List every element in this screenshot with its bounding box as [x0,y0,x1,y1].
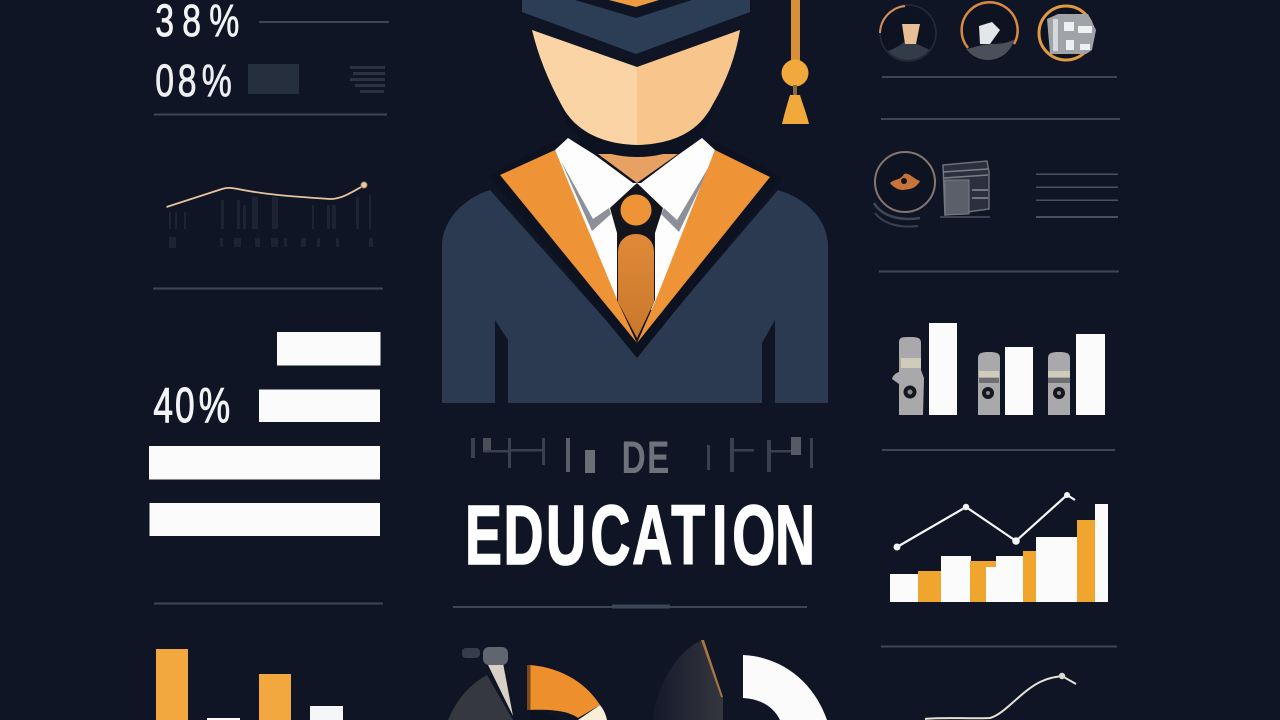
orange donut chart [527,665,607,720]
face left half [532,30,637,145]
subtitle left marks [471,438,595,473]
stat: 08 percent: 08% [155,56,232,106]
combo line and bar chart [890,492,1108,602]
faded stat note [350,66,385,93]
stepped columns [890,504,1108,602]
dark collar outline [488,141,783,358]
bottom right curve chart [925,673,1076,719]
stat: 40 percent: 40% [153,378,230,433]
device 3 [1048,352,1070,415]
donut cream segment [578,705,607,720]
trend line [897,495,1075,547]
subtitle right marks [707,437,813,472]
gauge base wedge [448,675,513,720]
emblem circle [874,152,935,227]
white shirt [555,138,715,310]
divider lines [153,21,1120,648]
face shadow ring [561,104,713,155]
face right half [637,30,740,145]
graduate figure [442,0,828,403]
avatar: book [1039,6,1096,60]
trend line [166,186,363,207]
gauge knob tab [462,648,480,658]
gauge needle [488,663,513,716]
small line chart [166,182,373,248]
suit jacket [442,190,828,403]
title: EDUCATION [465,490,815,583]
bottom centre gauge [448,647,513,720]
tassel ball [782,60,808,86]
horizontal bar chart [149,332,380,536]
tassel fringe [782,95,809,124]
device 2 [978,352,1000,415]
avatar: person [880,5,940,66]
wedge highlight edge [701,640,723,697]
avatar icons row [880,2,1096,66]
emblem and document icons [874,152,1118,227]
wedge body [653,640,723,720]
right lapel [637,150,770,343]
mortarboard cap [522,0,750,54]
tassel connector [793,85,797,95]
donut inner edge [527,665,530,710]
donut orange segment [530,665,600,718]
cap top button [609,0,659,7]
text placeholder lines [1036,174,1118,218]
white donut chart [743,655,827,720]
subtitle word: DE [622,433,671,483]
neck [598,154,678,183]
tie knot [620,194,652,226]
faded stat bar [248,64,299,94]
device and bar chart [892,323,1105,415]
document icon [940,161,990,218]
device 1 [892,337,924,415]
end point [361,182,367,188]
data points [894,492,1070,550]
bottom left bar chart [156,649,343,720]
avatar: play [960,2,1018,66]
dark pie wedge [653,640,723,720]
left lapel [500,150,637,343]
faint columns [169,195,373,248]
collar shadows [561,161,611,231]
white columns [929,323,1105,415]
tie outline [610,183,663,343]
gauge knob [483,647,508,665]
tie blade [618,234,654,338]
subtitle row [471,433,813,483]
tassel cord [791,0,800,63]
